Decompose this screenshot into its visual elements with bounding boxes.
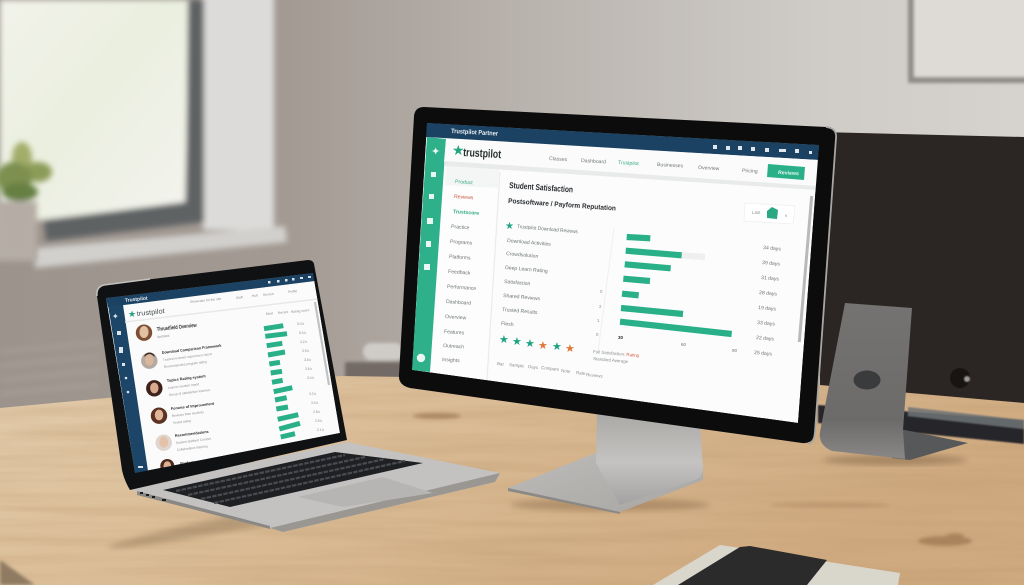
star rating: ★ <box>552 340 562 353</box>
laptop bar values: 3.9 k <box>302 349 309 353</box>
row labels: Trustpilot Download Reviews <box>517 224 579 235</box>
laptop bar values: 2.8 k <box>313 410 320 414</box>
nav items: Trustpilot <box>618 160 640 167</box>
panel heading: Postsoftware / Payform Reputation <box>508 198 616 213</box>
potted plant <box>0 142 52 261</box>
row labels: Crowdsolution <box>506 251 539 260</box>
star rating: ★ <box>499 333 509 346</box>
axis labels: 0 <box>596 332 599 337</box>
footer links: Note <box>561 368 571 374</box>
reviewer text: Recommendations <box>175 430 209 438</box>
second monitor behind <box>820 132 1024 403</box>
footer links: Rate <box>576 370 586 376</box>
reviewer text: Thrustfield Overview <box>157 323 198 333</box>
laptop logo <box>128 308 165 317</box>
avatar 3 <box>146 380 162 396</box>
laptop bar values: 3.4 k <box>307 376 314 380</box>
reviewer text: Reviews from students <box>172 410 205 418</box>
trustpilot logo <box>453 145 502 160</box>
navigation header <box>444 139 819 190</box>
laptop scrollbar <box>315 302 329 385</box>
grey monitor stand <box>820 303 968 465</box>
star rating: ★ <box>512 335 522 348</box>
laptop bar values: 2.1 k <box>317 428 324 432</box>
star rating: ★ <box>538 339 548 352</box>
filter control: Last <box>752 210 761 215</box>
top navy bar <box>426 123 819 160</box>
laptop header links: Hub <box>252 293 258 298</box>
keyboard behind <box>818 405 1024 444</box>
axis labels: 60 <box>681 342 687 347</box>
nav items <box>549 156 758 175</box>
reviewer text: Trusted reviewer experience report <box>163 352 212 362</box>
side menu: Trustscore <box>453 209 479 217</box>
laptop bar values: 5.0 k <box>299 331 306 335</box>
star rating: ★ <box>565 342 575 355</box>
side menu: Features <box>444 329 465 336</box>
avatar 2 <box>141 352 158 369</box>
nav items: Dashboard <box>581 158 606 165</box>
day values: 19 days <box>758 305 777 313</box>
row labels: Trusted Results <box>502 307 538 316</box>
chart footnote: Full Satisfaction: Rating <box>593 349 640 358</box>
chart footnote: Standard Average <box>593 356 629 364</box>
side menu: Outreach <box>443 343 464 350</box>
laptop logo: ★ <box>128 310 136 320</box>
row labels: Flesh <box>501 321 514 328</box>
side menu: Feedback <box>448 269 471 277</box>
filter control: v <box>785 213 788 218</box>
nav items: Pricing <box>742 168 758 175</box>
reviewer text: Topics Rating system <box>167 374 206 383</box>
footer links: Bar <box>497 361 505 367</box>
reviewer text: Student course recommendation <box>180 455 240 466</box>
side menu: Overview <box>445 314 467 321</box>
trustpilot logo: trustpilot <box>463 147 502 161</box>
avatar 1 <box>136 324 152 341</box>
side menu <box>442 166 499 380</box>
laptop header links <box>190 289 310 316</box>
axis labels: 1 <box>597 318 600 323</box>
laptop <box>97 260 500 555</box>
framed picture on wall <box>908 0 1024 83</box>
day values: 34 days <box>763 245 782 253</box>
reviewer text: Group of satisfaction learners <box>169 388 211 397</box>
filter control <box>744 203 795 224</box>
monitor stand and base <box>508 410 710 514</box>
side menu: Practice <box>451 224 470 231</box>
reviewer text: Recommended program rating <box>164 360 207 369</box>
laptop bar values: 3.6 k <box>305 367 312 371</box>
laptop sidebar: ✦ <box>112 312 119 321</box>
axis labels: 0 <box>600 289 603 294</box>
reviewer text: Download Comparison Framework <box>162 344 223 355</box>
laptop bar values <box>297 322 324 432</box>
star rating <box>500 335 574 352</box>
laptop header links: Showcase for the site <box>190 297 222 304</box>
reviewer text: Collaborative learning <box>177 444 208 452</box>
laptop top bar: Trustpilot <box>125 296 148 304</box>
side menu: Reviews <box>454 194 474 201</box>
laptop header links: Recent <box>278 310 289 315</box>
notebook and phone <box>653 545 900 585</box>
green button: Reviews <box>778 170 799 177</box>
laptop header links: Profile <box>288 289 298 294</box>
panel heading: Student Satisfaction <box>509 180 573 194</box>
bar chart <box>596 228 782 358</box>
avatar 4 <box>151 408 167 424</box>
monitor bezel <box>399 107 836 443</box>
day values: 25 days <box>754 350 773 358</box>
avatar 6 <box>160 459 174 468</box>
side menu: Product <box>455 179 473 186</box>
side menu: Performance <box>447 284 477 292</box>
laptop header links: Rating score <box>291 308 310 314</box>
row labels: Satisfaction <box>504 279 531 287</box>
monitor silver edge <box>808 127 836 443</box>
laptop sidebar <box>108 305 148 473</box>
reviewer text: Learner student report <box>168 382 200 390</box>
blurred object on the far shelf <box>345 343 415 380</box>
row labels: Download Activities <box>507 238 552 248</box>
nav items: Classes <box>549 156 568 163</box>
green sidebar <box>412 137 446 372</box>
laptop bar values: 3.8 k <box>304 358 311 362</box>
laptop bar chart <box>264 326 300 437</box>
keyboard <box>163 452 423 507</box>
axis labels: 90 <box>732 348 738 353</box>
side menu: Dashboard <box>446 299 471 307</box>
panel heading <box>508 182 616 210</box>
axis labels: 30 <box>618 335 624 340</box>
axis labels: 2 <box>599 304 602 309</box>
laptop top bar <box>106 273 315 307</box>
laptop bar values: 3.2 k <box>309 392 316 396</box>
footer links: Reviews <box>586 372 604 379</box>
nav items: Overview <box>698 165 720 172</box>
laptop bar values: 5.0 k <box>297 322 304 326</box>
day values: 22 days <box>756 335 775 343</box>
top navy bar: Trustpilot Partner <box>451 128 499 138</box>
side menu: Insights <box>442 357 460 364</box>
reviewer list with avatars <box>136 324 222 468</box>
row labels: ★ <box>505 221 514 232</box>
laptop logo: trustpilot <box>136 308 165 318</box>
row labels: Shared Reviews <box>503 293 541 302</box>
row labels: Deep Learn Rating <box>505 265 548 275</box>
footer links: Compare <box>541 365 560 372</box>
laptop header links: Staff <box>236 295 243 300</box>
row labels <box>501 221 579 328</box>
laptop bar values: 3.0 k <box>311 401 318 405</box>
green button <box>767 164 805 180</box>
star rating: ★ <box>525 337 535 350</box>
window <box>0 0 287 268</box>
avatar 5 <box>156 434 172 451</box>
axis labels <box>596 289 738 353</box>
radiator under the window <box>0 342 100 394</box>
day values: 28 days <box>759 290 778 298</box>
wooden desk <box>0 370 1024 585</box>
side menu: Programs <box>450 239 473 247</box>
laptop lid <box>97 260 347 490</box>
reviewer text: Updated <box>157 334 170 339</box>
scrollbar <box>799 196 812 342</box>
chart footnote <box>593 349 640 364</box>
laptop screen <box>106 273 340 473</box>
monitor screen <box>412 123 819 423</box>
day values: 31 days <box>761 275 780 283</box>
footer links <box>497 362 602 378</box>
reviewer text <box>156 324 222 464</box>
reviewer text: Forums of Improvement <box>171 402 215 411</box>
laptop base <box>107 442 500 555</box>
laptop bar values: 4.2 k <box>300 340 307 344</box>
trustpilot logo: ★ <box>452 143 465 159</box>
footer links: Days <box>528 364 539 370</box>
green sidebar: ✦ <box>431 145 440 158</box>
footer links: Sample <box>509 362 525 369</box>
day values: 33 days <box>757 320 776 328</box>
reviewer text: Tested rating <box>173 419 191 425</box>
side menu: Platforms <box>449 254 471 262</box>
nav items: Businesses <box>657 162 684 169</box>
laptop bar values: 2.5 k <box>315 419 322 423</box>
day values: 39 days <box>762 260 781 268</box>
laptop header links: Service <box>263 292 274 297</box>
background wall <box>0 0 1024 420</box>
desktop monitor <box>399 107 836 443</box>
laptop header links: Most <box>266 311 273 316</box>
reviewer text: Student platform Content <box>176 437 211 445</box>
day values <box>754 245 782 358</box>
